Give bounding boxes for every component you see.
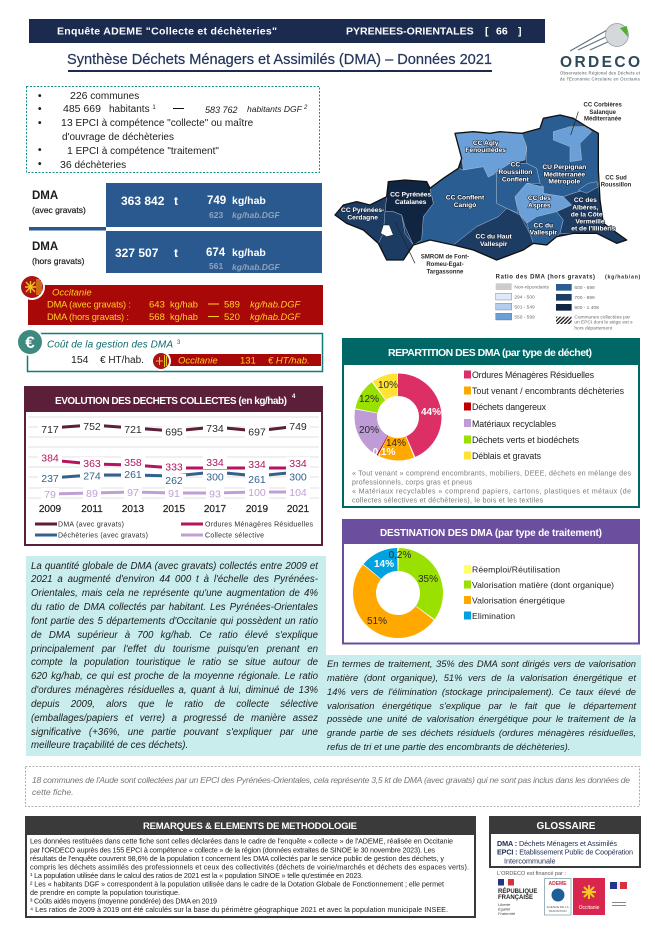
logo: Région Occitanie: Occitanie (579, 905, 600, 911)
outside labels: Méditerranée (584, 117, 622, 123)
map labels: CC des (574, 197, 597, 204)
data labels: selective collection: 93 (209, 488, 221, 500)
data labels: DMA (38, 419, 310, 439)
text block: quantities commentary: du ratio de DMA collectés par habitant. Les Pyrénées-Orientales (31, 602, 318, 613)
note: categories (352, 470, 632, 504)
donut labels: 0,2% (389, 550, 412, 561)
x axis years: 2015 (163, 504, 186, 515)
map labels: CC du Haut (476, 234, 513, 241)
panel: Occitanie comparison: DMA (avec gravats) : (47, 300, 131, 310)
data labels: selective collection: 97 (127, 487, 139, 499)
header banner: [ (485, 26, 489, 38)
text block: quantities commentary: d'ordures ménagères résiduelles a, quant à lui, diminué de 13% (31, 685, 318, 696)
panel: key figures: • (38, 159, 42, 170)
donut labels: 20% (359, 425, 379, 436)
data labels: residual waste: 334 (206, 457, 224, 469)
panel: management cost: 154 (71, 354, 89, 366)
funders logos (497, 871, 632, 916)
text block: quantities commentary (26, 556, 326, 756)
map: EPCI of Pyrénées-Orientales (335, 103, 641, 331)
glossary text: DMA : Déchets Ménagers et Assimilés (497, 839, 617, 848)
data labels: selective collection: 79 (44, 489, 56, 501)
outside labels: Targassonne (427, 269, 464, 275)
panel: glossary (489, 816, 641, 867)
text block: quantities commentary: meilleure traçabilité de ces déchets). (31, 740, 188, 751)
logo: République française: Liberté (498, 902, 511, 907)
panel: waste distribution (342, 338, 640, 507)
legend: treatment types: Valorisation énergétique (472, 596, 565, 606)
data labels: recycling centres: 261 (248, 474, 266, 486)
chart legend: Collecte sélective (205, 532, 264, 540)
data labels: selective collection: 104 (289, 487, 307, 499)
donut labels: 35% (418, 574, 438, 585)
text block: treatment commentary (326, 655, 641, 756)
map labels: CC Agly (473, 140, 499, 147)
legend: treatment types (464, 564, 614, 621)
panel: DMA without rubble: t (174, 246, 178, 260)
note: Aude communes (26, 766, 640, 806)
logo: République française: FRANÇAISE (498, 895, 533, 901)
methodology text: compris les déchets assimilés des professionnels et ceux des collectivités (déchets de voirie/marchés et déchets des espaces verts). (30, 862, 469, 872)
x axis years (39, 504, 310, 515)
panel: DMA without rubble (32, 231, 322, 273)
panel: key figures: • (38, 118, 42, 129)
leader lines (395, 112, 578, 263)
panel: management cost: € HT/hab. (268, 356, 310, 366)
panel: key figures: 2 (303, 105, 308, 111)
text block: treatment commentary: valorisation énergétique s'explique par le fait que le département (327, 700, 636, 711)
data labels: recycling centres: 237 (41, 473, 59, 485)
map labels: Aspres (528, 202, 551, 209)
panel: Occitanie comparison (28, 285, 323, 325)
map labels: CC Conflent (446, 195, 485, 202)
panel: DMA with rubble: DMA (32, 190, 58, 202)
map legend: hors département (574, 325, 613, 331)
donut chart: treatment types (364, 560, 432, 626)
panel: Occitanie comparison: kg/hab (170, 300, 198, 310)
map labels: Albères, (572, 204, 599, 211)
full outline (335, 115, 627, 260)
outside labels: Romeu-Egat- (426, 262, 464, 268)
data labels: residual waste: 334 (248, 459, 266, 471)
panel: waste evolution chart: 4 (292, 394, 296, 400)
panel: Occitanie comparison: 568 (149, 312, 165, 323)
data labels: recycling centres (38, 468, 310, 487)
note: categories: « Matériaux recyclables » comprend papiers, cartons, plastiques et métaux (de (352, 488, 631, 496)
text block: quantities commentary: significative (+36%, une partie pouvant s'expliquer par une (31, 727, 318, 738)
methodology text: ² Les « habitants DGF » correspondent à la population utilisée dans le cadre de la Dotation Globale de Fonctionnement ; elle permet (30, 880, 444, 888)
outside labels (421, 103, 632, 275)
note: categories: « Tout venant » comprend encombrants, mobiliers, DEEE, déchets en mélange des (352, 470, 632, 478)
methodology text: ¹ La population utilisée dans le calcul des ratios de 2021 est la « population SINOE » telle qu'estimée en 2023. (30, 871, 363, 880)
panel: Occitanie comparison: kg/hab (170, 312, 198, 322)
panel: key figures: 1 (152, 105, 156, 111)
map labels: Catalanes (395, 199, 427, 206)
text block: quantities commentary: Orientales, mais cela ne représente qu'une augmentation de 4% (31, 588, 318, 599)
panel: DMA with rubble: kg/hab (232, 195, 266, 207)
heading: evolution: EVOLUTION DES DECHETS COLLECTES (en kg/hab) (55, 396, 287, 407)
panel: DMA with rubble: t (174, 194, 178, 208)
heading: REPARTITION DES DMA (par type de déchet) (388, 347, 592, 359)
x axis years: 2013 (122, 504, 145, 515)
panel: key figures: • (38, 145, 42, 156)
map legend (496, 275, 641, 331)
panel: DMA with rubble: kg/hab.DGF (232, 210, 281, 220)
data labels: DMA: 752 (83, 421, 101, 433)
note: categories: professionnels, corps gras et pneus (352, 480, 472, 486)
data labels: DMA: 695 (165, 426, 183, 438)
panel: DMA with rubble: 623 (209, 210, 223, 220)
text block: quantities commentary: depuis 2009, alors que le ratio de collecte sélective (31, 699, 318, 710)
map labels: CC Pyrénées- (341, 207, 384, 214)
outside labels: Salanque (589, 110, 617, 116)
donut labels: 14% (374, 559, 394, 570)
logo: ORDECO: de l'Economie Circulaire en Occitanie (560, 76, 641, 82)
map labels: Méditerranée (544, 171, 585, 178)
panel: key figures (26, 86, 320, 172)
data labels: residual waste (38, 451, 310, 474)
panel: key figures: • (38, 91, 42, 102)
map labels: CC Pyrénées (390, 191, 431, 198)
data labels: recycling centres: 274 (83, 470, 101, 482)
donut labels: 10% (378, 380, 398, 391)
text block: quantities commentary: compte la population touristique le ratio se situe autour de (31, 657, 318, 668)
text block: treatment commentary: refus de tri et une partie des encombrants de déchèteries). (327, 741, 570, 752)
methodology text (30, 836, 469, 914)
map labels: de la Côte (571, 211, 603, 218)
methodology text: Les données restituées dans cette fiche sont celles déclarées dans le cadre de l'enquête « collecte » de l'ADEME, réalisée en Occitanie (30, 836, 453, 846)
logo: République française: Fraternité (498, 911, 516, 916)
x axis years: 2017 (204, 504, 227, 515)
outside labels: Roussillon (601, 183, 632, 189)
panel: DMA without rubble: kg/hab.DGF (232, 262, 281, 272)
data labels: selective collection (41, 486, 310, 501)
text block: quantities commentary: La quantité globale de DMA (avec gravats) collectés entre 2009 et (31, 560, 318, 572)
data labels: recycling centres: 300 (206, 472, 224, 484)
icon: Occitanie emblem (19, 274, 45, 300)
methodology text: de prendre en compte la population touristique. (30, 888, 180, 897)
text block: quantities commentary: 2021 a augmenté d'environ 44 000 t à l'échelle des Pyrénées- (31, 574, 318, 585)
panel: DMA without rubble: 561 (209, 261, 223, 271)
map labels: Métropole (548, 179, 581, 186)
map legend: Ratio des DMA (hors gravats) (496, 275, 595, 281)
map legend: 294 - 500 (514, 294, 535, 300)
map legend: 600 - 699 (574, 285, 595, 291)
panel: management cost: 3 (177, 340, 181, 346)
data labels: DMA: 697 (248, 426, 266, 438)
panel: DMA with rubble: 749 (207, 195, 226, 207)
x axis years: 2009 (39, 504, 62, 515)
map legend: 501 - 549 (514, 304, 535, 310)
donut labels: 0,1% (373, 447, 396, 458)
panel: management cost (28, 334, 322, 372)
legend: waste types: Matériaux recyclables (472, 419, 557, 429)
glossary text: Intercommunale (504, 856, 556, 866)
icon: euro (16, 328, 44, 356)
panel: management cost: € HT/hab. (100, 355, 144, 366)
panel: key figures: 36 déchèteries (60, 159, 126, 171)
donut labels: 51% (367, 616, 387, 627)
text block: quantities commentary: de DMA supérieur à 700 kg/hab. Ce ratio élevé s'explique (31, 630, 318, 641)
header banner: Enquête ADEME "Collecte et déchèteries" (57, 26, 277, 38)
legend: waste types: Déchets dangereux (472, 402, 547, 412)
logo: République française: Égalité (498, 906, 511, 912)
map labels: CC du (534, 223, 553, 230)
text block: quantities commentary: (emballages/papiers et verre) a progressé de manière assez (31, 713, 318, 724)
legend: waste types: Déchets verts et biodéchets (472, 435, 580, 445)
donut labels (359, 380, 441, 458)
data labels: residual waste: 384 (41, 452, 59, 464)
map labels: Vermeille (575, 218, 605, 225)
map labels: CU Perpignan (542, 164, 586, 171)
panel: key figures: 1 EPCI à compétence "traitement" (67, 145, 219, 157)
logo: ORDECO: Observatoire Régional des Déchets et (560, 70, 641, 76)
text block: quantities commentary: 620 kg/hab, ce qui est proche de la moyenne régionale. Le ratio (31, 671, 318, 682)
panel: Occitanie comparison: 643 (149, 300, 165, 310)
data labels: DMA: 749 (289, 421, 307, 433)
panel: key figures: habitants DGF (247, 104, 302, 114)
legend: treatment types: Réemploi/Réutilisation (472, 564, 560, 574)
data labels: recycling centres: 300 (289, 472, 307, 484)
panel: key figures: 13 EPCI à compétence "collecte" ou maître (61, 117, 254, 129)
heading: DESTINATION DES DMA (par type de traitement) (380, 528, 602, 539)
panel: DMA without rubble: (hors gravats) (32, 256, 85, 266)
legend: treatment types: Valorisation matière (dont organique) (472, 580, 614, 590)
data labels: DMA: 717 (41, 424, 59, 436)
panel: DMA without rubble: 674 (206, 247, 226, 259)
note: Aude communes: 18 communes de l'Aude sont collectées par un EPCI des Pyrénées-Orientales, cela représente 3,5 kt de DMA (avec gravats) qui ne sont pas inclus dans les données de (32, 775, 630, 785)
map legend: (kg/hab/an) (605, 275, 641, 281)
note: Aude communes: cette fiche. (32, 787, 74, 797)
map legend: 550 - 599 (514, 314, 535, 320)
panel: Occitanie comparison: Occitanie (52, 288, 92, 298)
panel: management cost: Coût de la gestion des DMA (47, 340, 173, 350)
heading: REMARQUES & ELEMENTS DE METHODOLOGIE (143, 821, 357, 832)
glossary text: EPCI : Etablissement Public de Coopération (497, 848, 633, 856)
panel: Occitanie comparison: 589 (224, 300, 240, 310)
panel: DMA without rubble: kg/hab (232, 247, 266, 259)
logo: ADEME: ADEME (548, 881, 567, 887)
legend: waste types: Déblais et gravats (472, 451, 542, 461)
data labels: selective collection: 89 (86, 488, 98, 500)
text block: treatment commentary: En termes de traitement, 35% des DMA sont dirigés vers de valorisation (327, 658, 636, 669)
legend: waste types: Ordures Ménagères Résiduelles (472, 370, 595, 380)
outside labels: SMROM de Font- (421, 255, 469, 261)
legend: waste types (464, 370, 625, 461)
header banner: 66 (496, 26, 508, 38)
panel: waste evolution chart (24, 386, 323, 545)
logo: ADEME (544, 878, 571, 915)
map labels: et de l'Illibéris (571, 225, 616, 232)
data labels: DMA: 734 (206, 423, 224, 435)
methodology text: résultats de l'enquête couvrent 98,6% de la population t concernent les DMA collectés par le service public de gestion des déchets, y (30, 854, 444, 863)
panel: key figures: 226 communes (70, 90, 139, 102)
panel: methodology notes (25, 816, 476, 917)
panel: DMA with rubble: 363 842 (121, 194, 165, 208)
map legend: Communes collectées par (574, 314, 631, 320)
panel: key figures: habitants (109, 104, 150, 115)
panel: management cost: 131 (240, 356, 256, 366)
header banner: PYRENEES-ORIENTALES (346, 26, 474, 38)
panel: DMA with rubble: (avec gravats) (32, 205, 86, 215)
map labels (341, 140, 616, 248)
panel: Occitanie comparison: kg/hab.DGF (250, 312, 301, 322)
heading: GLOSSAIRE (537, 821, 596, 832)
text block: quantities commentary: font partie des 5 départements d'Occitanie qui possèdent un ratio (31, 616, 318, 627)
map labels: Canigó (454, 202, 476, 209)
logo: République française (498, 879, 537, 916)
donut labels: 14% (386, 438, 406, 449)
chart legend: Déchèteries (avec gravats) (58, 532, 148, 540)
logo: ADEME: TRANSITION (548, 909, 567, 913)
donut labels (367, 550, 438, 627)
header banner: ] (518, 26, 522, 38)
legend: waste types: Tout venant / encombrants déchèteries (472, 386, 625, 396)
panel: DMA with rubble (29, 183, 322, 230)
map labels: CC des (528, 195, 551, 202)
donut labels: 12% (359, 394, 379, 405)
map labels: Fenouillèdes (465, 147, 506, 154)
text block: treatment commentary: 14% vers de l'élimination (stockage principalement). Ce taux élevé de (327, 686, 636, 697)
panel: management cost: Occitanie (178, 356, 218, 366)
x axis years: 2019 (246, 504, 269, 515)
map labels: Vallespir (480, 241, 508, 248)
panel: waste destination (342, 519, 640, 644)
funders logos: L'ORDECO est financé par : (497, 871, 566, 877)
panel: Occitanie comparison: DMA (hors gravats) : (47, 312, 129, 322)
panel: Occitanie comparison: 520 (224, 312, 240, 323)
text block: quantities commentary: principalement par l'effet du tourisme puisqu'en prenant en (31, 644, 318, 655)
panel: key figures: d'ouvrage de déchèteries (62, 132, 174, 143)
donut chart: waste types (366, 385, 430, 449)
logo: ORDECO: ORDECO (560, 54, 640, 71)
map legend: Non-répondants (514, 284, 550, 290)
methodology text: ⁴ Les ratios de 2009 à 2019 ont été calculés sur la base du périmètre géographique 2021 et avec la population municipale INSEE. (30, 905, 448, 914)
data labels: residual waste: 363 (83, 458, 101, 470)
glossary text (497, 839, 633, 866)
panel: key figures: 583 762 (205, 105, 238, 115)
map labels: Vallespir (530, 230, 557, 237)
logo: ORDECO (560, 24, 641, 82)
map legend: 900 - 1 408 (574, 305, 599, 311)
panel: key figures: • (38, 104, 42, 115)
data labels: recycling centres: 262 (165, 475, 183, 487)
logo: Préfecture (607, 878, 632, 915)
outside labels: CC Sud (605, 175, 627, 181)
line chart series (50, 425, 298, 494)
panel: Occitanie comparison: kg/hab.DGF (250, 300, 301, 310)
methodology text: par l'ORDECO auprès des 155 EPCI à compétence « collecte » de la région (données extraites de SINOE le 30 novembre 2023). Les (30, 846, 435, 854)
outside labels: CC Corbières (584, 103, 622, 109)
chart legend: Ordures Ménagères Résiduelles (205, 522, 314, 528)
map legend: un EPCI dont le siège est s (574, 319, 633, 325)
data labels: selective collection: 91 (168, 488, 180, 500)
map legend: 700 - 899 (574, 295, 595, 301)
header banner (29, 19, 545, 43)
map labels: Cerdagne (347, 214, 378, 221)
data labels: residual waste: 358 (124, 457, 142, 469)
data labels: residual waste: 333 (165, 462, 183, 474)
data labels: recycling centres: 261 (124, 469, 142, 481)
panel: DMA without rubble: 327 507 (115, 246, 159, 260)
text block: treatment commentary: matière (dont organique), 51% vers de la valorisation énergétique et (327, 672, 636, 683)
note: categories: collectes sélectives et déchèteries), le bois et les textiles (352, 498, 544, 504)
map labels: Roussillon (498, 169, 532, 176)
map labels: CC (511, 162, 520, 169)
logo: ADEME: AGENCE DE LA (546, 905, 569, 909)
text block: treatment commentary: grande partie de ses déchets résiduels (ordures ménagères résiduelles, (327, 727, 636, 738)
methodology text: ³ Coûts aidés moyens (moyenne pondérée) des DMA en 2019 (30, 896, 217, 906)
title: Synthèse Déchets Ménagers et Assimilés (DMA) – Données 2021 (67, 52, 492, 68)
text block: treatment commentary: possède une unité de valorisation énergétique pour le traitement de la (327, 713, 636, 724)
map labels: Conflent (502, 176, 530, 183)
chart legend: DMA (avec gravats) (58, 522, 124, 528)
panel: key figures: 485 669 (63, 103, 101, 115)
panel: DMA without rubble: DMA (32, 241, 58, 253)
chart legend (35, 522, 314, 540)
data labels: selective collection: 100 (248, 487, 266, 499)
donut labels: 44% (421, 407, 441, 418)
logo: République française: RÉPUBLIQUE (498, 887, 537, 895)
x axis years: 2011 (81, 504, 103, 515)
data labels: residual waste: 334 (289, 458, 307, 470)
x axis years: 2021 (287, 504, 310, 515)
data labels: DMA: 721 (124, 424, 142, 436)
legend: treatment types: Elimination (472, 611, 515, 621)
icon: euro: € (25, 333, 35, 352)
